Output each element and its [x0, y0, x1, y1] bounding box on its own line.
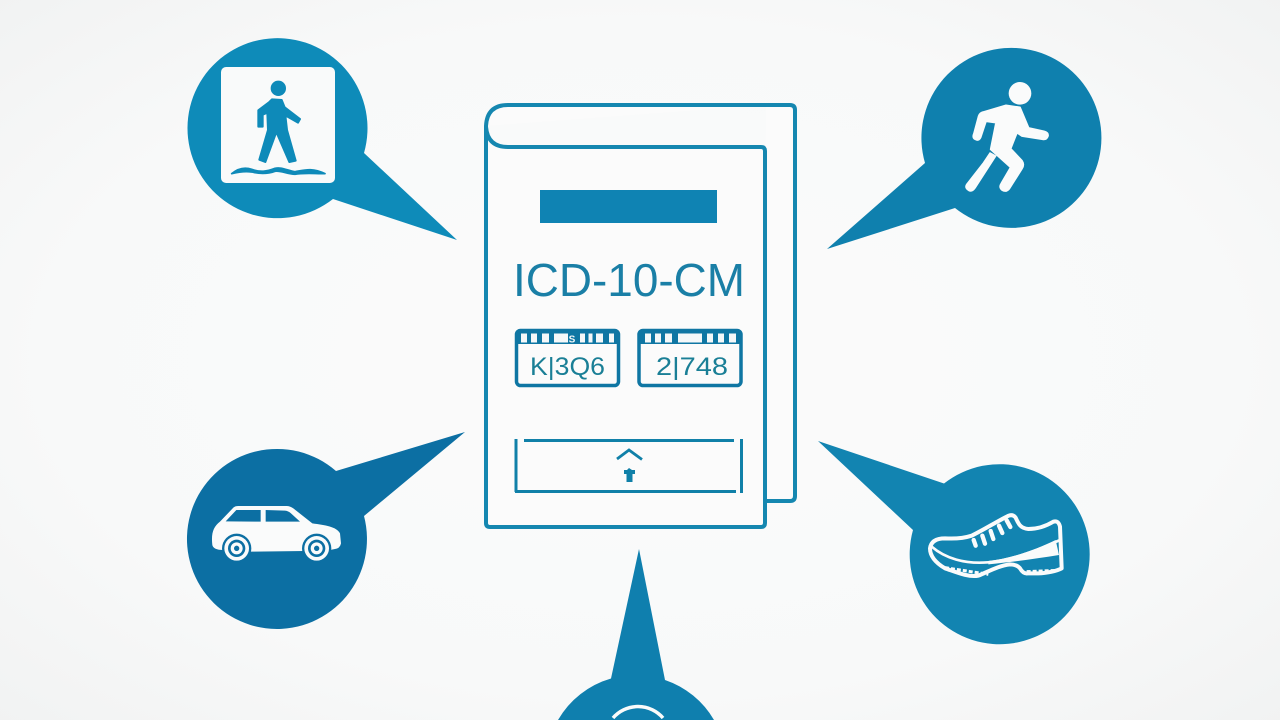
callout bubble: [187, 432, 465, 629]
icon: walking person: [232, 81, 325, 174]
callout bubble: [187, 38, 457, 240]
callout bubble: [558, 549, 714, 720]
code box left: S: [569, 334, 576, 346]
callout bubble: [818, 441, 1090, 644]
code box right: [639, 330, 741, 386]
code box left: K|3Q6: [530, 353, 605, 381]
icon: shoe: [930, 515, 1062, 576]
callout: shoe: [818, 441, 1090, 644]
code box left: [516, 330, 618, 386]
icon: white sign panel: [221, 67, 335, 183]
icon: car: [212, 506, 341, 563]
book illustration: [486, 105, 795, 527]
book back cover and spine: [486, 105, 795, 527]
callout: car: [187, 432, 465, 629]
book title: ICD-10-CM: [513, 254, 745, 306]
icon: runner: [966, 82, 1048, 191]
icon: partial ring: [613, 707, 663, 718]
code box right: 2|748: [656, 353, 728, 381]
callout: running person: [827, 48, 1101, 249]
callout bubble: [827, 48, 1101, 249]
callout: pedestrian: [187, 38, 457, 240]
title bar: [540, 190, 717, 223]
bottom panel with arrow: [515, 439, 742, 493]
callout: bottom partial: [558, 549, 714, 720]
